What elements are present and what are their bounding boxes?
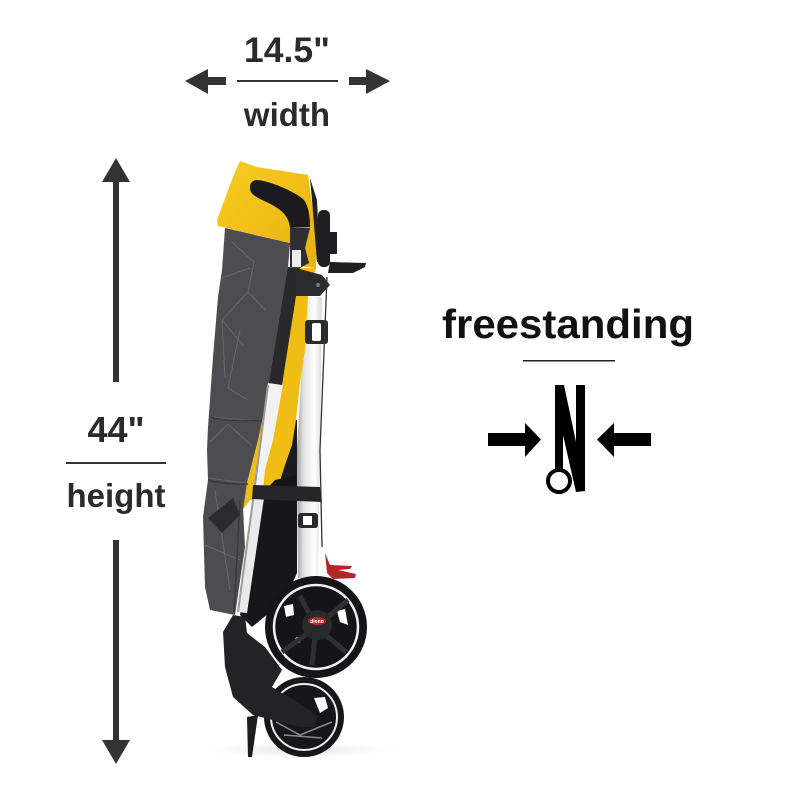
silver stub xyxy=(292,250,301,267)
stroller photo xyxy=(185,161,415,760)
width label: 14.5" xyxy=(244,30,330,70)
height label: height xyxy=(67,477,166,514)
large wheel xyxy=(265,576,367,678)
icon: folded stroller symbol xyxy=(548,385,585,492)
quilt seams xyxy=(205,242,265,590)
cable xyxy=(320,277,327,547)
height label xyxy=(66,409,166,514)
leg hinge and arm xyxy=(223,615,318,727)
yellow seat fabric xyxy=(243,268,316,547)
rear clip xyxy=(305,320,328,344)
tube shading xyxy=(238,385,268,612)
arrow: width left xyxy=(185,69,226,94)
arrow: squeeze right xyxy=(488,423,541,457)
hanging tag xyxy=(208,498,240,533)
yellow canopy xyxy=(217,161,317,268)
gap between leg and wheel xyxy=(252,628,266,642)
arrow: squeeze left xyxy=(597,423,651,457)
wheel badge: diono xyxy=(310,619,324,625)
lower clip xyxy=(298,513,318,528)
red brake xyxy=(325,553,356,579)
divider line xyxy=(523,360,615,362)
black upper sleeve xyxy=(269,267,300,385)
small wheel xyxy=(264,677,344,757)
front silver tube upper xyxy=(253,383,283,500)
arrow: height up xyxy=(102,158,130,382)
freestanding heading: freestanding xyxy=(442,301,694,347)
black seat underside xyxy=(240,475,297,627)
gray body xyxy=(203,228,290,615)
width label xyxy=(237,30,338,133)
rear frame tube xyxy=(297,297,322,578)
front silver tube lower xyxy=(237,498,264,613)
folding bracket xyxy=(296,268,330,296)
height label: 44" xyxy=(87,409,145,450)
arrow: height down xyxy=(102,540,130,764)
width label: width xyxy=(243,96,330,133)
floor shadow xyxy=(185,740,415,760)
rear upper black parts xyxy=(318,210,366,273)
handle joint xyxy=(290,227,310,268)
foot xyxy=(247,715,258,757)
handle grip xyxy=(250,180,310,227)
middle bracket xyxy=(252,485,322,502)
dark sliver behind seat xyxy=(278,420,297,485)
arrow: width right xyxy=(349,69,390,94)
dark strip behind canopy xyxy=(310,178,320,262)
